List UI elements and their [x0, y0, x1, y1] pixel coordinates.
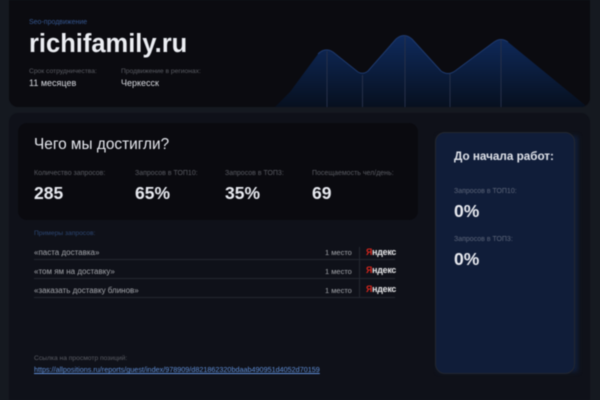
- stat: before top 3: 0%: [454, 249, 479, 269]
- stat: before top 10: [454, 188, 517, 221]
- text: position 3: 1 место: [325, 286, 352, 295]
- text: promotion region: Продвижение в регионах:: [121, 68, 201, 75]
- text: query 2: «том ям на доставку»: [34, 267, 115, 276]
- chart: area with three peaks: [276, 34, 585, 108]
- text: link caption: Ссылка на просмотр позиций:: [34, 355, 127, 362]
- text: promotion region: Черкесск: [121, 78, 159, 88]
- stat: before top 3: Запросов в ТОП3:: [454, 236, 513, 243]
- panel: before work: [435, 132, 575, 374]
- stat: top 10: 65%: [135, 183, 170, 203]
- panel: achievements: [18, 123, 418, 220]
- label: service type: Seo-продвижение: [29, 19, 87, 26]
- logo: yandex 2: Яндекс: [366, 265, 396, 275]
- text: promotion region: [120, 68, 201, 88]
- text: cooperation term: Срок сотрудничества:: [29, 68, 97, 75]
- label: query examples: Примеры запросов:: [34, 230, 95, 237]
- panel: main: [9, 113, 590, 400]
- text: query 3: «заказать доставку блинов»: [34, 286, 139, 295]
- stat: top 10: Запросов в ТОП10:: [135, 170, 198, 177]
- stat: queries count: 285: [34, 183, 63, 203]
- heading: before work: До начала работ:: [454, 150, 554, 163]
- stat: daily visitors: [312, 169, 394, 203]
- text: cooperation term: [28, 68, 97, 88]
- stat: top 3: [224, 170, 284, 203]
- heading: achievements: Чего мы достигли?: [34, 136, 169, 153]
- logo: yandex 3: Яндекс: [366, 284, 396, 294]
- text: position 2: 1 место: [325, 267, 352, 276]
- stat: daily visitors: Посещаемость чел/день:: [312, 170, 394, 177]
- text: position 1: 1 место: [325, 248, 352, 257]
- panel: before work glow: [438, 136, 578, 372]
- text: query 1: «паста доставка»: [34, 248, 99, 257]
- stat: top 3: 35%: [225, 183, 260, 203]
- table: query examples: [34, 247, 396, 295]
- title: site name: richifamily.ru: [29, 30, 187, 58]
- stat: queries count: [34, 170, 105, 203]
- stat: before top 10: 0%: [454, 201, 479, 221]
- stat: top 3: Запросов в ТОП3:: [225, 170, 284, 177]
- stat: daily visitors: 69: [312, 183, 331, 203]
- link: positions report: https://allpositions.ru/reports/guest/index/978909/d821862320bdaab490951d4052d70159: [34, 365, 320, 374]
- stat: top 10: [134, 170, 198, 203]
- stat: before top 10: Запросов в ТОП10:: [454, 188, 517, 195]
- logo: yandex 1: Яндекс: [366, 247, 396, 257]
- stat: queries count: Количество запросов:: [34, 170, 105, 177]
- panel: header: [9, 0, 590, 107]
- text: cooperation term: 11 месяцев: [29, 78, 76, 88]
- stat: before top 3: [454, 236, 513, 269]
